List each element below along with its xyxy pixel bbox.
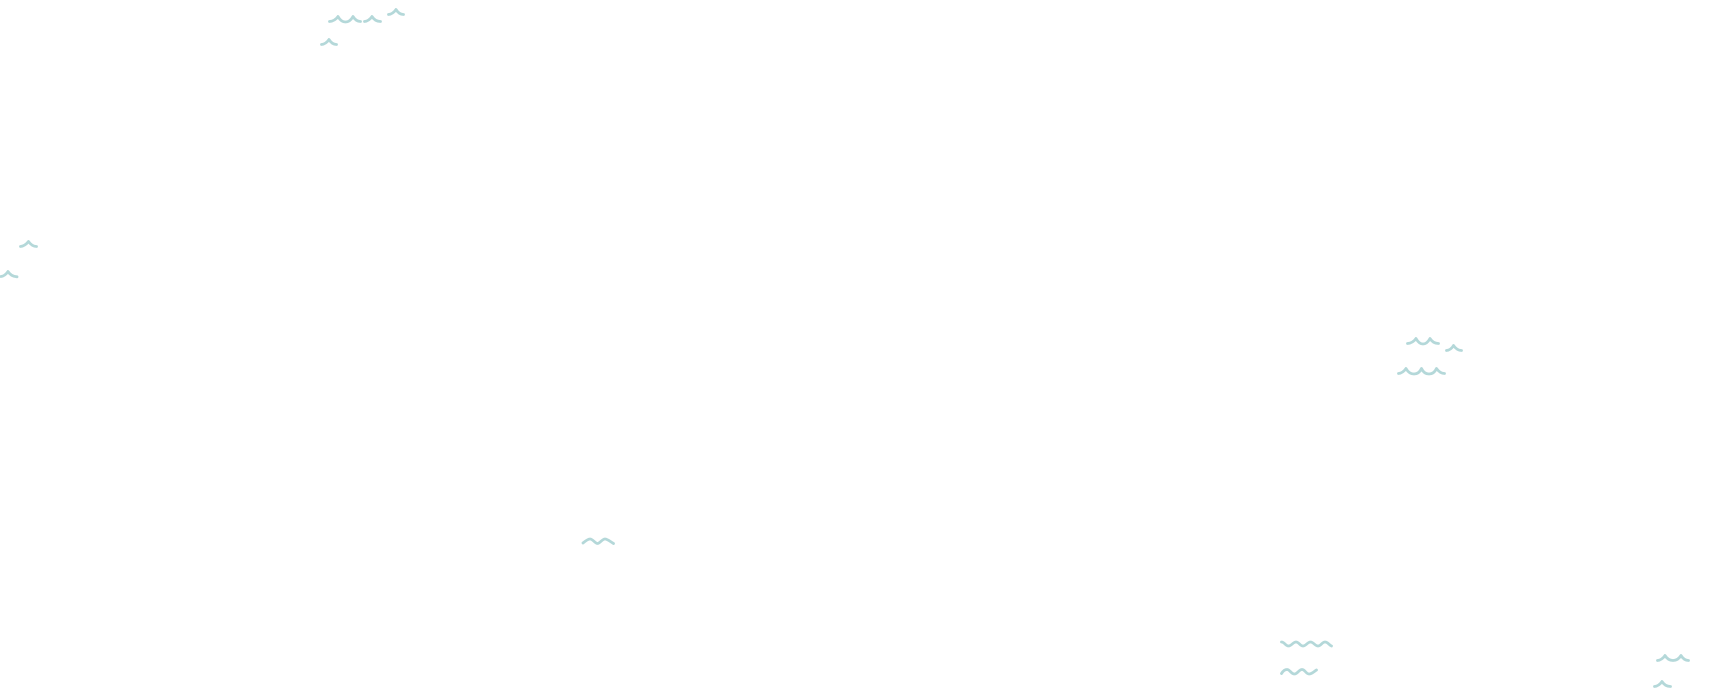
- icon: waves bottom right double: [1658, 656, 1688, 660]
- icon: wave top single far right: [388, 10, 404, 14]
- icon: waves right lower triple: [1398, 368, 1444, 374]
- icon: waves top double: [330, 16, 360, 22]
- icon: waves right upper double: [1408, 338, 1438, 344]
- icon: wave center smooth: [583, 539, 614, 544]
- icon: wave left upper: [20, 242, 36, 246]
- icon: wave top single right: [364, 16, 380, 22]
- icon: wave right single: [1446, 346, 1462, 350]
- icon: wave lower right short: [1282, 670, 1316, 674]
- icon: wave left lower: [1, 272, 17, 277]
- icon: wave lower right long: [1282, 642, 1332, 646]
- icon: wave top single lower: [322, 40, 336, 44]
- icon: wave bottom right single: [1654, 682, 1670, 686]
